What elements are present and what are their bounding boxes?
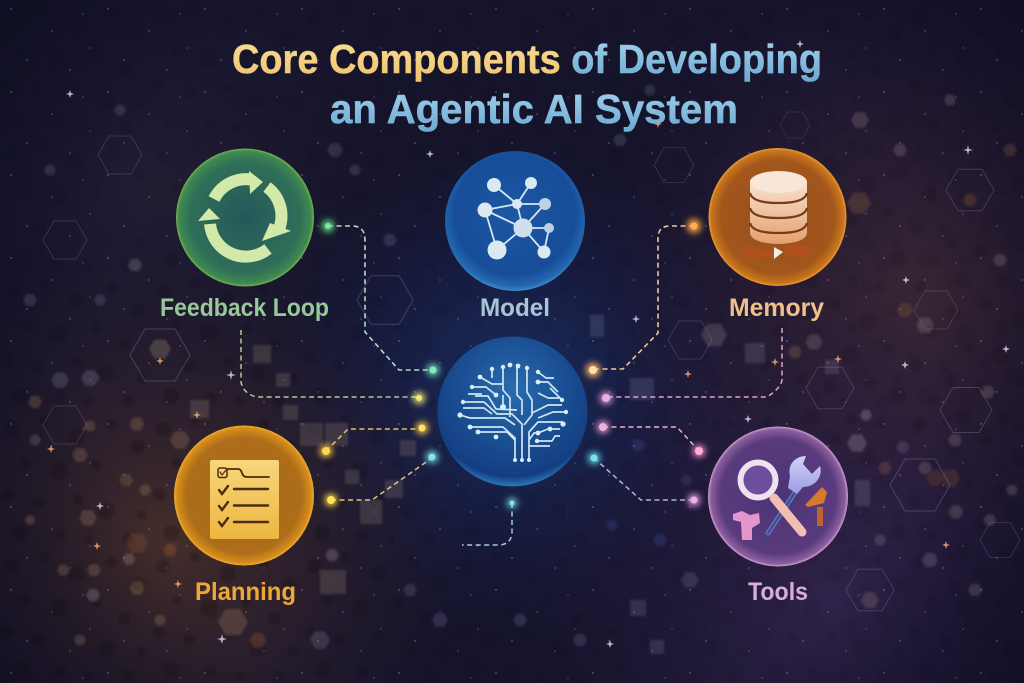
node: memory — [708, 148, 846, 322]
connector: brain to tools lower — [588, 452, 700, 506]
icon: database — [740, 171, 812, 259]
title: Core Components of Developing — [232, 36, 822, 82]
connector: planning to brain lower — [325, 451, 438, 506]
title — [232, 36, 822, 132]
node: model — [445, 151, 585, 322]
label: tools: Tools — [748, 578, 808, 606]
node: central brain — [438, 336, 588, 486]
node: feedback loop — [160, 148, 329, 322]
label: memory: Memory — [729, 294, 824, 322]
label: model: Model — [480, 294, 550, 322]
connector: brain bottom — [462, 498, 517, 545]
icon: circular arrows — [198, 171, 291, 257]
node: planning — [174, 426, 314, 606]
icon: checklist — [210, 460, 279, 539]
connector: memory lower path — [600, 328, 782, 404]
connector: brain to tools upper — [597, 421, 705, 457]
connector: feedback loop to brain — [322, 220, 439, 376]
icon: tools — [733, 456, 827, 540]
title: an Agentic AI System — [330, 86, 738, 132]
node: tools — [708, 426, 848, 606]
connector: feedback loop lower path — [241, 330, 425, 404]
label: feedback loop: Feedback Loop — [160, 294, 329, 322]
label: planning: Planning — [195, 578, 296, 606]
icon: circuit brain — [457, 363, 568, 462]
connector: planning to brain upper — [320, 422, 428, 457]
icon: neural network — [478, 177, 554, 260]
connector: memory to brain — [586, 219, 701, 377]
